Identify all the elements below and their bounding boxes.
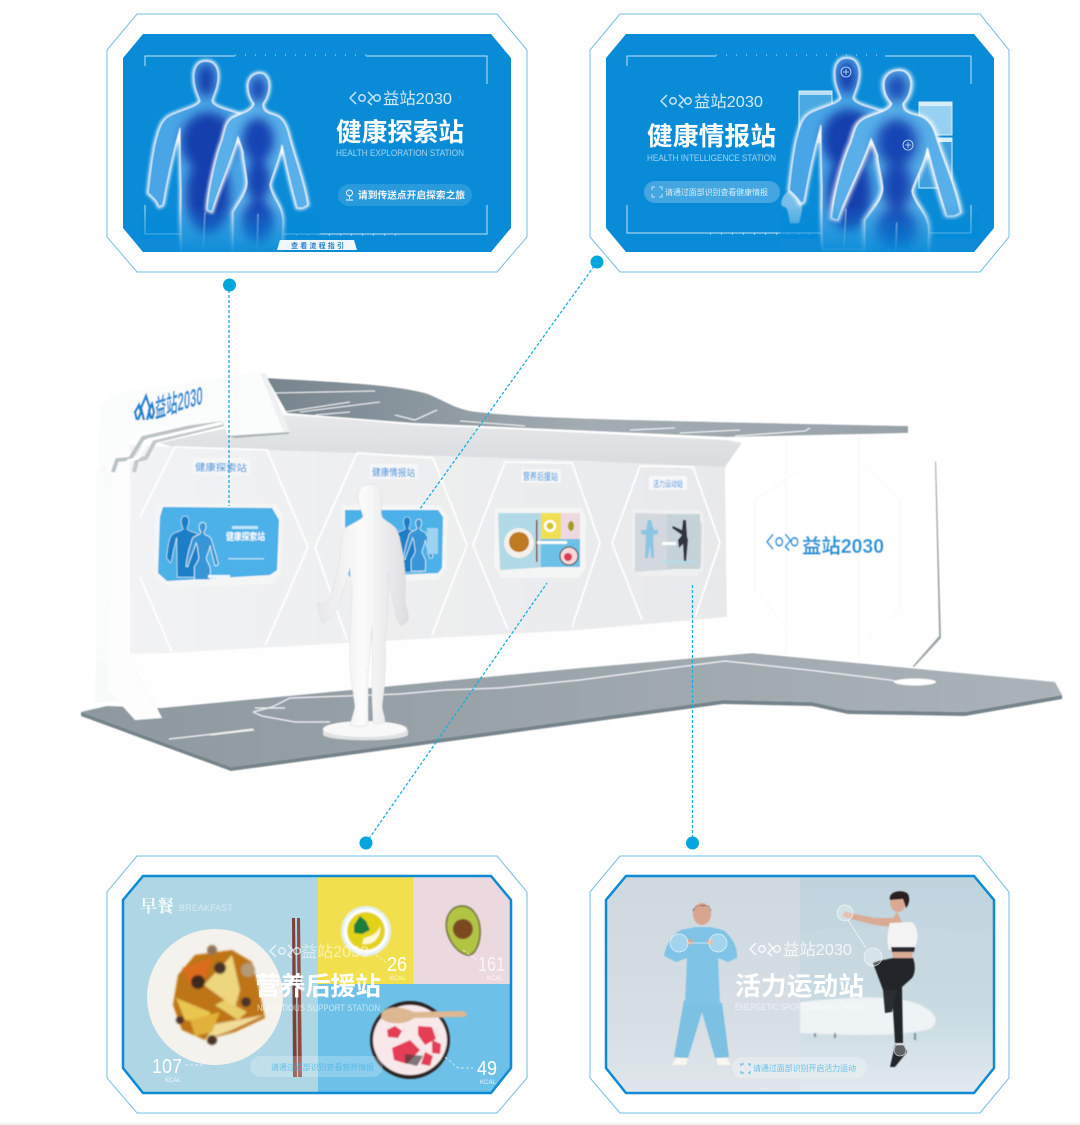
roof top surface <box>263 372 908 440</box>
calorie callouts: KCAL <box>390 976 406 982</box>
subtitle: NUTRITIOUS SUPPORT STATION <box>257 1003 380 1014</box>
subtitle: ENERGETIC SPORTSWEAR STATION <box>735 1002 866 1013</box>
left arch pillar <box>95 400 162 720</box>
hud frame <box>145 56 487 234</box>
dashed connector: exploration <box>223 278 236 506</box>
logo: 益站2030 <box>783 941 852 959</box>
title: 活力运动站 <box>735 972 864 1001</box>
wall station labels: 健康探索站 <box>195 461 247 474</box>
end wall logo: 益站2030 <box>802 535 884 558</box>
berry bowl <box>370 1001 467 1079</box>
guide tab: 查看流程指引 <box>291 241 344 250</box>
calorie callouts: 49 <box>477 1058 497 1080</box>
tracking rings <box>670 905 906 1056</box>
prompt pill: 请通过面部识别查看健康情报 <box>665 187 768 197</box>
silhouettes: couple <box>780 58 980 264</box>
panel: energetic sportswear station <box>590 856 1009 1113</box>
calorie callouts: 161 <box>478 954 505 976</box>
title: 健康探索站 <box>336 118 464 147</box>
sofa <box>800 997 936 1041</box>
floor circuit lines <box>169 661 915 739</box>
mini screen 4: sports <box>632 509 704 576</box>
calorie callouts: KCAL <box>480 1080 496 1086</box>
back wall <box>130 445 727 655</box>
silhouettes: couple <box>140 61 320 253</box>
arch stripes <box>113 420 224 472</box>
wall station labels: 健康情报站 <box>372 466 415 479</box>
sign logo <box>135 396 154 420</box>
sign wordmark: 益站2030 <box>155 382 203 424</box>
wall station labels <box>192 458 687 490</box>
dashed connector: sports <box>686 583 699 850</box>
calorie callouts: 26 <box>387 954 407 976</box>
prompt pill: 请到传送点开启探索之旅 <box>358 188 465 202</box>
title: 健康情报站 <box>647 122 776 151</box>
meal heading: BREAKFAST <box>179 903 233 914</box>
markers <box>841 67 913 150</box>
logo <box>661 93 763 111</box>
meal heading <box>140 896 233 916</box>
human figure on base <box>317 484 408 740</box>
title: 营养后援站 <box>255 972 381 1001</box>
floor platform <box>81 653 1062 771</box>
dashed connector: intelligence <box>420 256 604 509</box>
prompt pill <box>250 1056 383 1077</box>
prompt pill <box>338 184 472 206</box>
wall skirt <box>125 617 752 708</box>
meal heading: 早餐 <box>140 896 174 916</box>
logo <box>750 941 852 959</box>
tai chi man <box>664 903 737 1065</box>
panel: health intelligence station <box>590 14 1009 272</box>
arch sign header <box>100 372 290 470</box>
prompt pill: 请通过面部识别开启活力运动 <box>753 1063 856 1073</box>
prompt pill: 请通过面部识别查看营养情报 <box>271 1062 374 1072</box>
logo <box>350 90 452 108</box>
logo <box>270 943 369 961</box>
chopsticks <box>292 918 302 1077</box>
end wall octagon <box>725 433 941 667</box>
roof underside <box>160 415 742 467</box>
calorie callouts: KCAL <box>165 1078 181 1084</box>
calorie callouts: 107 <box>152 1056 182 1078</box>
prompt pill <box>644 181 780 203</box>
subtitle: HEALTH EXPLORATION STATION <box>336 148 464 159</box>
prompt pill <box>732 1057 867 1078</box>
booth scene <box>81 372 1062 771</box>
subtitle: HEALTH INTELLIGENCE STATION <box>647 153 776 164</box>
page base strip <box>0 1123 1080 1125</box>
calorie callouts <box>152 950 505 1086</box>
wall station labels: 活力运动站 <box>653 479 683 489</box>
logo: 益站2030 <box>301 943 369 961</box>
mini screen 2: health intelligence <box>342 505 448 582</box>
soup bowl <box>341 906 391 956</box>
kicking woman <box>842 891 918 1067</box>
panel: nutrition support station <box>107 856 527 1113</box>
end wall logo <box>767 534 884 558</box>
hexagon wall frames <box>140 447 720 652</box>
floor spot <box>894 678 936 686</box>
avocado <box>444 904 483 958</box>
logo: 益站2030 <box>694 93 763 111</box>
hud frame <box>627 56 971 233</box>
mini screen 1: health exploration: 健康探索站 <box>226 531 265 543</box>
calorie callouts: KCAL <box>487 976 503 982</box>
dashed connector: nutrition <box>360 583 547 850</box>
panel: health exploration station <box>107 14 527 272</box>
wall station labels: 营养后援站 <box>523 470 558 483</box>
data cards behind figures <box>799 91 952 188</box>
logo: 益站2030 <box>383 90 452 108</box>
guide tab <box>277 240 357 250</box>
mini screen 1: health exploration <box>153 503 283 588</box>
plate of food <box>147 929 283 1065</box>
mini screen 3: nutrition <box>494 508 586 578</box>
